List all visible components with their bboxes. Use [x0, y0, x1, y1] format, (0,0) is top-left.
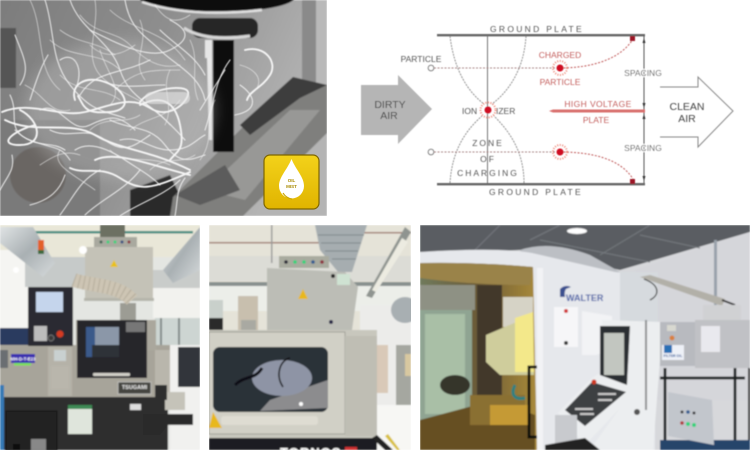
label: zone of charging: OF	[480, 154, 496, 164]
smoke strands	[0, 0, 272, 216]
charged particle top	[553, 61, 567, 75]
ionizer point	[480, 102, 496, 118]
icon: oil mist badge: MIST	[286, 184, 297, 189]
icon: oil mist badge	[264, 155, 319, 209]
arrow: clean air	[660, 77, 733, 147]
photo: Tsugami machine with filter: MH-D-T-E23	[10, 356, 36, 362]
control panel	[582, 311, 612, 355]
duct pipe	[640, 275, 725, 306]
arrow: dirty air: DIRTY	[374, 99, 406, 111]
photo: milling tool with oil mist smoke	[0, 0, 327, 216]
icon: oil mist badge: OIL	[288, 178, 296, 183]
label: bottom ground plate: GROUND PLATE	[489, 187, 583, 197]
lower parts	[6, 411, 57, 450]
arrow: dirty air	[361, 75, 432, 144]
label: ionizer: ION	[462, 106, 477, 116]
label: charged particle: CHARGED	[539, 50, 581, 60]
label plate	[11, 354, 35, 363]
zone of charging curves	[450, 36, 526, 183]
glass door	[420, 263, 537, 450]
label: ionizer: IZER	[496, 106, 515, 116]
diagram: electrostatic precipitator	[361, 24, 733, 197]
machine base	[209, 438, 377, 450]
label: zone of charging	[457, 138, 519, 178]
photo: Tsugami machine with filter: TSUGAMI	[122, 385, 148, 391]
label: spacing: SPACING	[624, 68, 662, 78]
label: particle: PARTICLE	[401, 54, 442, 64]
label: zone of charging: ZONE	[472, 138, 504, 148]
label: zone of charging: CHARGING	[457, 168, 519, 178]
walter logo: WALTER	[566, 293, 604, 303]
label: ionizer	[462, 106, 515, 116]
filter box	[85, 247, 153, 299]
walter logo	[560, 286, 604, 303]
arrow: clean air: CLEAN	[669, 101, 705, 113]
electrical box	[668, 392, 714, 445]
window	[213, 347, 328, 412]
photo: Walter machine with filter	[420, 225, 750, 450]
label: spacing	[624, 68, 662, 153]
filter unit	[267, 268, 358, 330]
charged particle bottom	[553, 145, 567, 159]
arrow: clean air: AIR	[678, 113, 696, 125]
high voltage plate	[549, 99, 645, 125]
spacing line	[642, 36, 646, 183]
high voltage plate: PLATE	[583, 115, 609, 125]
label: top ground plate: GROUND PLATE	[490, 24, 584, 34]
label: charged particle: PARTICLE	[540, 77, 581, 87]
window	[77, 320, 147, 378]
particle path bottom	[428, 149, 635, 184]
label: spacing: SPACING	[624, 143, 662, 153]
smoke haze	[25, 40, 215, 180]
ionizer wire	[486, 36, 488, 183]
particle path top	[428, 36, 635, 71]
machine body	[0, 345, 170, 398]
machine enclosure	[209, 330, 377, 438]
control panel	[28, 287, 73, 346]
arrow: dirty air: AIR	[380, 110, 398, 122]
photo: Tsugami machine with filter	[0, 225, 200, 450]
machine enclosure	[420, 250, 655, 450]
stand	[660, 368, 745, 450]
high voltage plate: HIGH VOLTAGE	[564, 99, 632, 109]
ground plates	[437, 34, 645, 185]
label: charged particle	[539, 50, 581, 87]
photo: machine with box-mounted filter	[209, 225, 411, 450]
photo: Walter machine with filter: FILTER OIL	[664, 354, 683, 358]
filter unit	[660, 322, 700, 366]
